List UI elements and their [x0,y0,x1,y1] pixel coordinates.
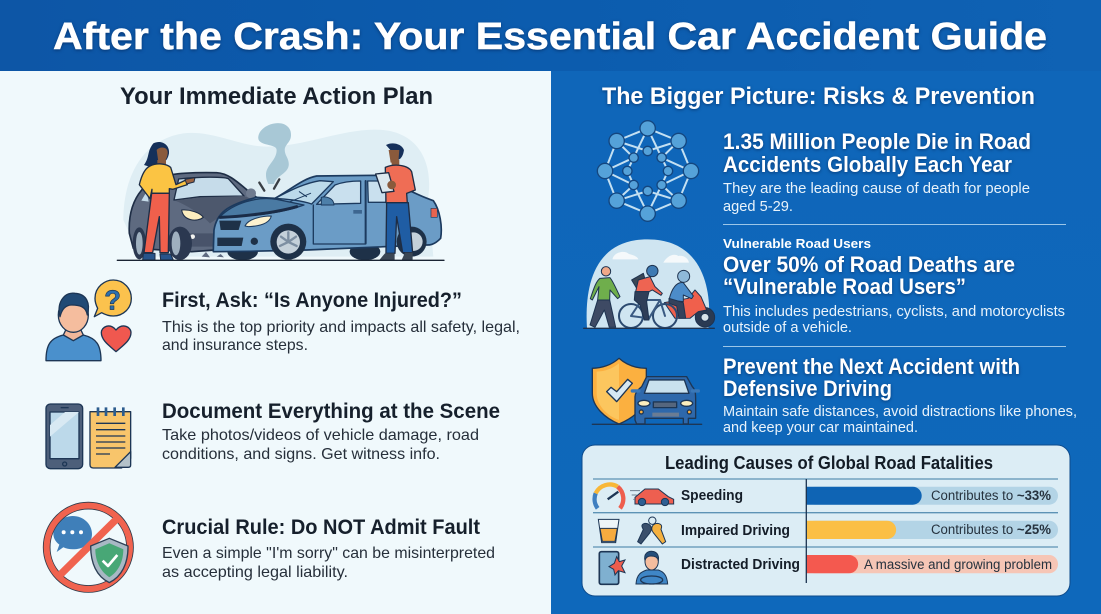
text block: crucial rule: Crucial Rule: Do NOT Admit Fault [162,516,480,539]
text block: first, ask: This is the top priority and impacts all safety, legal, [162,319,520,336]
row: speeding: Speeding [681,488,743,504]
text block: defensive driving: Prevent the Next Accident with [723,354,1020,379]
title banner [0,0,1101,71]
motorcycle and rider [695,308,715,327]
text block: defensive driving [723,354,1077,436]
row: speeding: Contributes to ~33% [931,488,1051,503]
icon: shield and car [592,358,702,424]
panel: left background [0,71,551,614]
text block: document everything: Take photos/videos of vehicle damage, road [162,427,479,444]
icon: phone and notepad [46,404,131,469]
row: impaired driving: Impaired Driving [681,523,790,539]
pedestrian [601,267,611,276]
text block: document everything: Document Everything at the Scene [162,400,500,423]
text block: document everything: conditions, and signs. Get witness info. [162,446,440,463]
text block: 1.35 million: aged 5-29. [723,199,793,215]
text block: vulnerable road users: Vulnerable Road Users [723,236,871,251]
text block: vulnerable road users: “Vulnerable Road Users” [723,274,966,299]
panel heading: Leading Causes of Global Road Fatalities [665,453,993,473]
text block: 1.35 million: Accidents Globally Each Year [723,152,1012,177]
text block: crucial rule: as accepting legal liability. [162,564,348,581]
text block: first, ask: First, Ask: “Is Anyone Injured?” [162,289,462,312]
text block: defensive driving: and keep your car maintained. [723,420,918,436]
title banner: After the Crash: Your Essential Car Accident Guide [53,16,1047,58]
row: impaired driving: Contributes to ~25% [931,522,1051,537]
text block: 1.35 million: They are the leading cause of death for people [723,181,1030,197]
row: distracted driving: Distracted Driving [681,557,800,573]
text block: vulnerable road users [723,236,1065,336]
text block: crucial rule [162,516,495,581]
bicycle and rider [619,304,643,328]
text block: 1.35 million [723,129,1031,215]
row: impaired driving [598,517,1058,544]
text block: 1.35 million: 1.35 Million People Die in Road [723,129,1031,154]
heading: immediate action plan: Your Immediate Action Plan [120,83,433,110]
text block: first, ask [162,289,520,354]
woman [144,142,169,167]
icon: no admitting fault [47,506,130,589]
row: distracted driving [599,551,1058,584]
blue car body [213,175,441,252]
icon: global network [597,121,699,221]
icon: person with question and heart [46,280,131,361]
row: distracted driving: A massive and growing problem [864,557,1052,572]
text block: crucial rule: Even a simple "I'm sorry" can be misinterpreted [162,545,495,562]
icon: person with question and heart: ? [104,284,121,315]
text block: first, ask: and insurance steps. [162,337,308,354]
text block: defensive driving: Defensive Driving [723,376,892,401]
panel: leading causes of global road fatalities [582,445,1070,596]
text block: vulnerable road users: This includes pedestrians, cyclists, and motorcyclists [723,304,1065,320]
grey car [129,173,257,252]
row: speeding [595,485,1058,508]
panel: right background [551,71,1101,614]
text block: vulnerable road users: Over 50% of Road Deaths are [723,252,1015,277]
text block: document everything [162,400,500,463]
blue car dark wheels below [227,243,258,260]
icon: vulnerable road users [584,239,715,328]
man [386,143,404,160]
text block: vulnerable road users: outside of a vehicle. [723,320,852,336]
heading: bigger picture: The Bigger Picture: Risks & Prevention [602,83,1035,110]
illustration: car crash scene [117,123,444,260]
text block: defensive driving: Maintain safe distances, avoid distractions like phones, [723,404,1077,420]
